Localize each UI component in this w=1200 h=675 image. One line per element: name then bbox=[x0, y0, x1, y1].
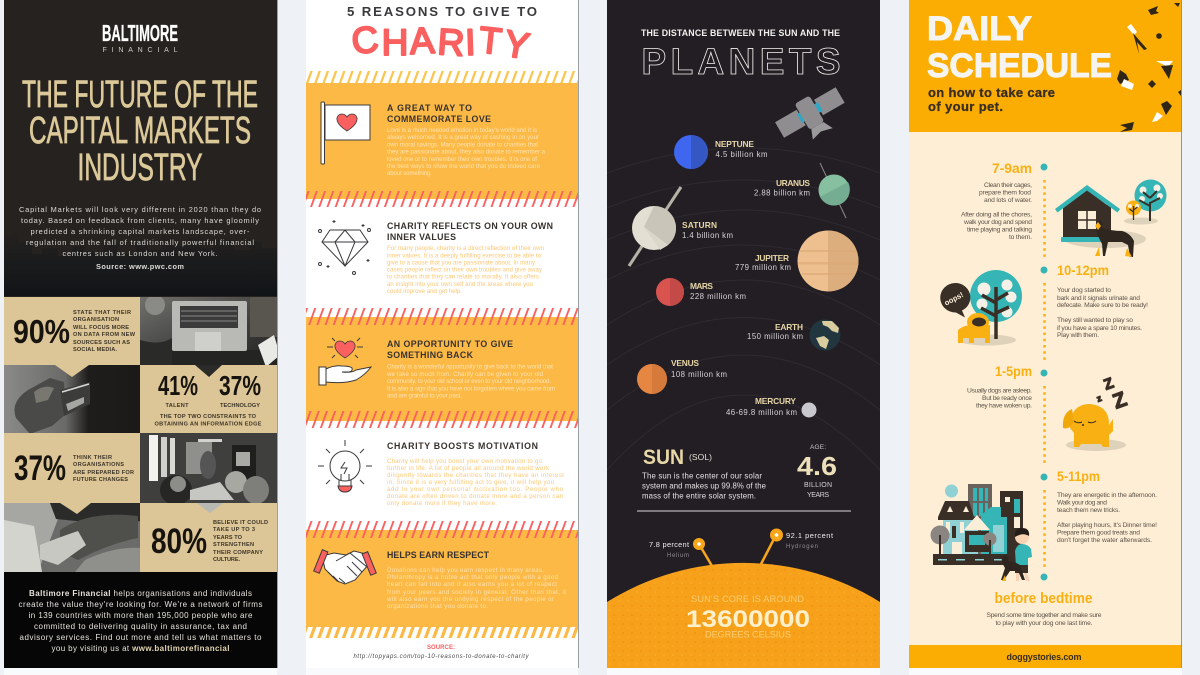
section 1 text: they are passionate about, they also donate to remember a bbox=[387, 148, 546, 156]
time: before bedtime: Spend some time together and make sure bbox=[986, 612, 1102, 619]
title: 5 REASONS TO GIVE TO bbox=[347, 4, 537, 19]
planet: Neptune bbox=[674, 135, 768, 169]
icon: light bulb bbox=[318, 440, 372, 492]
planet: Mars: MARS bbox=[690, 281, 713, 291]
callout: helium: 7.8 percent bbox=[649, 540, 689, 549]
footer: about Baltimore Financial bbox=[4, 572, 277, 668]
footer band: doggystories.com bbox=[1006, 652, 1082, 662]
time: 1-5pm: But be ready once bbox=[982, 395, 1032, 402]
section 3 text: we take so much from. Charity can be given to your old bbox=[386, 371, 543, 378]
panel: 5 Reasons to Give to Charity bbox=[306, 0, 579, 668]
section 5 text: Donations can help you earn respect in many areas. bbox=[387, 567, 544, 574]
illustration: sleeping dog: z bbox=[1095, 393, 1103, 404]
planet: Uranus: 2.88 billion km bbox=[754, 188, 810, 198]
stat: 37 percent prepared: FUTURE CHANGES bbox=[73, 477, 128, 483]
intro text: today. Based on feedback from clients, many have gloomily bbox=[21, 216, 259, 225]
time: before bedtime bbox=[986, 590, 1102, 627]
icon: hand holding heart bbox=[319, 338, 371, 385]
sun age: 4.6 bbox=[797, 451, 837, 481]
time: 5-11pm: They are energetic in the afternoon. bbox=[1057, 492, 1157, 499]
section 2 text: INNER VALUES bbox=[387, 232, 456, 242]
title: CHARITY bbox=[350, 18, 532, 67]
stat: 41 and 37 percent constraints: TECHNOLOGY bbox=[220, 403, 260, 409]
time: 5-11pm: 5-11pm bbox=[1057, 469, 1100, 484]
photo: restaurant table bbox=[140, 433, 277, 505]
time: 7-9am: to them. bbox=[1009, 234, 1032, 241]
intro text: centres such as London and New York. bbox=[62, 249, 218, 258]
section 5 text: will also earn you the undying respect of the people or bbox=[386, 596, 554, 603]
illustration: oops pug and tree bbox=[940, 270, 1022, 346]
illustration: sleeping dog: Z bbox=[1110, 388, 1130, 414]
time: 7-9am: prepare them food bbox=[979, 190, 1031, 196]
section 2 text: could improve and get help. bbox=[387, 288, 462, 295]
time: 1-5pm: they have woken up. bbox=[976, 402, 1032, 410]
section bands bbox=[306, 71, 578, 638]
time: 7-9am: Clean their cages, bbox=[984, 182, 1032, 189]
planet: Neptune: NEPTUNE bbox=[715, 139, 754, 149]
icon: satellite bbox=[772, 82, 853, 152]
intro text bbox=[19, 205, 261, 271]
stat: 80 percent culture: YEARS TO bbox=[213, 535, 243, 541]
planet: Uranus: URANUS bbox=[776, 178, 810, 188]
section 2 text: to charities that they can relate to morally. It also offers bbox=[387, 274, 539, 280]
title bbox=[22, 74, 258, 189]
stat: 80 percent culture: CULTURE. bbox=[213, 557, 240, 563]
title: SCHEDULE bbox=[927, 47, 1112, 85]
intro text: predicted a shrinking capital markets landscape, over- bbox=[30, 227, 250, 236]
divider bbox=[637, 510, 851, 512]
sun core temperature: 13600000 bbox=[686, 606, 810, 633]
source: http://topyaps.com/top-10-reasons-to-donate-to-charity bbox=[354, 654, 530, 660]
sun core temperature bbox=[686, 594, 810, 640]
stat: 90 percent: ORGANISATION bbox=[73, 317, 119, 323]
stat: 41 and 37 percent constraints: 37% bbox=[219, 370, 261, 401]
planet: Earth: EARTH bbox=[775, 322, 803, 332]
illustration: sleeping dog: Z bbox=[1102, 375, 1116, 394]
title: on how to take care bbox=[928, 85, 1055, 100]
decorative confetti icons bbox=[1117, 3, 1181, 132]
timeline bbox=[1040, 164, 1048, 580]
icon: handshake bbox=[314, 550, 376, 584]
logo: Baltimore Financial: BALTIMORE bbox=[102, 20, 178, 46]
time: 7-9am: After doing all the chores, bbox=[961, 212, 1032, 218]
time: before bedtime: to play with your dog one last time. bbox=[996, 620, 1093, 627]
section 3 text: Charity is a wonderful opportunity to give back to the world that bbox=[387, 364, 553, 370]
stat: 80 percent culture bbox=[151, 520, 268, 563]
planet: Saturn bbox=[629, 187, 733, 266]
stat: 37 percent prepared: ARE PREPARED FOR bbox=[73, 470, 134, 476]
callout: helium: Helium bbox=[667, 553, 689, 559]
time: 10-12pm: defecate. Make sure to be ready! bbox=[1057, 302, 1148, 309]
stat: 80 percent culture: TAKE UP TO 3 bbox=[213, 527, 255, 533]
footer: about Baltimore Financial: committed to delivering quality in assurance, tax and bbox=[34, 622, 247, 631]
stat: 41 and 37 percent constraints: THE TOP TWO CONSTRAINTS TO bbox=[160, 414, 257, 420]
stat: 80 percent culture: THEIR COMPANY bbox=[213, 550, 263, 556]
section 4 text: add to your own personal motivation too. People who bbox=[387, 486, 564, 493]
section 1 text: A GREAT WAY TO bbox=[387, 103, 472, 113]
section 1 text: Love is a much needed emotion in today's world and it is bbox=[387, 127, 537, 134]
illustration: dog house and trees bbox=[1055, 180, 1166, 257]
section 4 text: diligently towards the charities that they have an interest bbox=[387, 472, 564, 479]
section 1 text: always welcomed. It is a great way of cashing in on your bbox=[387, 134, 539, 141]
footer: about Baltimore Financial: you by visiting us at www.baltimorefinancial bbox=[52, 644, 230, 653]
section 1 text: COMMEMORATE LOVE bbox=[387, 114, 491, 124]
notch arrows bbox=[195, 365, 223, 513]
footer: about Baltimore Financial: in 139 countries with more than 195,000 people who are bbox=[28, 611, 253, 620]
stat: 90 percent: 90% bbox=[13, 313, 70, 350]
stat: 37 percent prepared: ORGANISATIONS bbox=[73, 462, 124, 468]
section 5 text: from your peers and society in general. Other than that, it bbox=[387, 589, 566, 596]
title: DAILY bbox=[927, 10, 1032, 48]
time: 5-11pm: Prepare them good treats and bbox=[1057, 530, 1140, 536]
title: CAPITAL MARKETS bbox=[29, 110, 251, 152]
section 1 text: the best ways to show the world that you do indeed care bbox=[387, 163, 541, 170]
photo: laptop on desk bbox=[140, 295, 280, 368]
planet: Neptune: 4.5 billion km bbox=[716, 150, 768, 159]
footer: about Baltimore Financial: advisory services. Find out more and tell us what matters to bbox=[20, 633, 262, 642]
stat: 41 and 37 percent constraints bbox=[154, 370, 262, 428]
icon: diamond bbox=[318, 220, 370, 274]
title: INDUSTRY bbox=[78, 147, 202, 189]
callout: helium bbox=[649, 538, 712, 566]
stat: 90 percent: ON DATA FROM NEW bbox=[73, 332, 136, 338]
callout: hydrogen: 92.1 percent bbox=[786, 531, 833, 540]
stat: 80 percent culture: BELIEVE IT COULD bbox=[213, 520, 268, 526]
photo: hand holding phone bbox=[4, 365, 140, 434]
section 3 text: community, to your old school or even to your old neighborhood. bbox=[387, 378, 551, 385]
sun description: The sun is the center of our solar bbox=[642, 472, 762, 480]
planet: Jupiter bbox=[735, 230, 858, 292]
icon: flag with heart bbox=[321, 102, 370, 164]
planet: Mars bbox=[656, 278, 746, 306]
title: THE FUTURE OF THE bbox=[22, 74, 258, 116]
section 4 text: Charity will help you boost your own motivation to go bbox=[387, 458, 543, 465]
section 3 text bbox=[386, 339, 555, 400]
section 5 text: organizations that you donate to. bbox=[387, 603, 488, 610]
section 2 text: inner values. It is a deeply fulfilling exercise to be able to bbox=[387, 252, 542, 260]
section 1 text: loved one or to remember their own troubles. It is one of bbox=[387, 156, 537, 163]
time: 7-9am: 7-9am bbox=[992, 161, 1032, 176]
intro text: Capital Markets will look very different in 2020 than they do bbox=[19, 205, 261, 214]
section 5 text: heart can fall into and it also earns you a lot of respect bbox=[387, 581, 557, 588]
planet: Mercury bbox=[726, 396, 816, 418]
planet: Jupiter: 779 million km bbox=[735, 263, 791, 272]
stat: 90 percent bbox=[13, 310, 136, 353]
stat grid tan blocks bbox=[4, 297, 277, 572]
footer band bbox=[909, 645, 1181, 668]
source: SOURCE: bbox=[427, 645, 455, 651]
stat: 90 percent: SOCIAL MEDIA. bbox=[73, 347, 117, 353]
section 4 text: only donate more if they have more. bbox=[387, 500, 497, 507]
title: THE DISTANCE BETWEEN THE SUN AND THE bbox=[641, 28, 840, 38]
sun disc bbox=[607, 563, 880, 668]
section 5 text bbox=[386, 550, 566, 610]
section 4 text: CHARITY BOOSTS MOTIVATION bbox=[387, 441, 538, 451]
section 4 text: donate are often driven to donate more and a person can bbox=[387, 493, 563, 500]
planet: Earth bbox=[747, 320, 840, 350]
intro text: Source: www.pwc.com bbox=[96, 262, 184, 271]
sun age: BILLION bbox=[804, 482, 832, 489]
footer: about Baltimore Financial: create the value they're looking for. We're a network of firms bbox=[18, 600, 262, 609]
stat: 37 percent prepared: 37% bbox=[14, 449, 66, 488]
title: PLANETS bbox=[642, 41, 840, 82]
time: 7-9am: and lots of water. bbox=[984, 197, 1032, 204]
planet: Jupiter: JUPITER bbox=[755, 253, 789, 263]
sun description: SUN bbox=[643, 446, 684, 469]
stat: 37 percent prepared bbox=[14, 449, 134, 488]
section 3 text: and are grateful to your past. bbox=[387, 392, 462, 400]
panel: Daily Schedule bbox=[909, 0, 1182, 668]
section 3 text: SOMETHING BACK bbox=[387, 350, 474, 360]
planet: Venus: VENUS bbox=[671, 358, 699, 368]
panel: Baltimore Financial capital markets bbox=[4, 0, 280, 668]
time: 5-11pm: teach them new tricks. bbox=[1057, 507, 1120, 514]
title: of your pet. bbox=[928, 99, 1003, 114]
planet: Venus: 108 million km bbox=[671, 370, 727, 379]
section 2 text: cases people reflect on their own troubles and give away bbox=[387, 266, 543, 274]
section 5 text: HELPS EARN RESPECT bbox=[387, 550, 490, 560]
bottom page strips bbox=[4, 668, 1182, 675]
time: before bedtime: before bedtime bbox=[994, 590, 1092, 607]
planet: Mercury: MERCURY bbox=[755, 396, 796, 406]
time: 1-5pm bbox=[967, 364, 1032, 410]
stat: 37 percent prepared: THINK THEIR bbox=[73, 455, 112, 461]
time: 5-11pm: After playing hours, It's Dinner time! bbox=[1057, 522, 1157, 529]
section 1 text: about something. bbox=[387, 170, 432, 177]
section 3 text: AN OPPORTUNITY TO GIVE bbox=[387, 339, 513, 349]
section 2 text: CHARITY REFLECTS ON YOUR OWN bbox=[387, 221, 553, 231]
sun core temperature: DEGREES CELSIUS bbox=[705, 630, 791, 640]
section 5 text: Philanthropy is a noble act that only people with a good bbox=[387, 574, 558, 581]
planet: Saturn: 1.4 billion km bbox=[682, 231, 733, 240]
logo: Baltimore Financial: FINANCIAL bbox=[102, 47, 178, 54]
section 2 text: an insight into your own self and the areas where you bbox=[387, 281, 533, 288]
illustration: city, boy and dog bbox=[930, 484, 1032, 581]
intro text: regulation and the fall of traditionally powerful financial bbox=[26, 238, 254, 247]
stat: 80 percent culture: 80% bbox=[151, 522, 207, 561]
section 4 text: further in life. A lot of people all around the world work bbox=[387, 465, 550, 472]
stat: 90 percent: SOURCES SUCH AS bbox=[73, 340, 130, 346]
section 3 text: It is also a sign that you have not forgotten where you came from bbox=[387, 386, 555, 392]
stat: 90 percent: STATE THAT THEIR bbox=[73, 310, 131, 316]
time: 1-5pm: 1-5pm bbox=[995, 364, 1032, 379]
panel: Distance between the Sun and the Planets bbox=[607, 0, 880, 668]
time: 5-11pm bbox=[1057, 469, 1157, 544]
header band bbox=[909, 0, 1181, 132]
time: 10-12pm bbox=[1057, 263, 1148, 339]
title bbox=[927, 10, 1112, 114]
section 1 text: own moral savings. Many people donate to charities that bbox=[387, 142, 538, 148]
section 2 text: give to a cause that you are passionate about. In many bbox=[387, 260, 536, 266]
time: 10-12pm: 10-12pm bbox=[1057, 263, 1109, 278]
callout: hydrogen bbox=[760, 528, 833, 566]
stat: 90 percent: WILL FOCUS MORE bbox=[73, 325, 129, 331]
illustration: oops pug and tree: oops! bbox=[943, 290, 965, 308]
sun description: system and makes up 99.8% of the bbox=[642, 482, 766, 490]
callout: hydrogen: Hydrogen bbox=[786, 544, 818, 550]
time: 5-11pm: don't forget the water afterwards. bbox=[1057, 537, 1152, 544]
sun age: YEARS bbox=[807, 492, 829, 499]
orbits bbox=[607, 148, 880, 470]
city skyline backdrop bbox=[4, 232, 277, 296]
logo: Baltimore Financial bbox=[102, 20, 178, 54]
stat: 41 and 37 percent constraints: TALENT bbox=[166, 403, 189, 409]
time: 10-12pm: Your dog started to bbox=[1057, 287, 1111, 294]
source bbox=[354, 645, 530, 660]
photo: person in plaid using phone bbox=[4, 503, 140, 572]
stat: 41 and 37 percent constraints: OBTAINING AN INFORMATION EDGE bbox=[154, 422, 262, 428]
section 2 text: For many people, charity is a direct reflection of their own bbox=[387, 245, 544, 252]
sun age: AGE: bbox=[810, 444, 826, 451]
section 4 text: in. Since it is a very fulfilling act to give, it will help you bbox=[387, 479, 554, 486]
time: 7-9am: time playing and talking bbox=[967, 226, 1032, 234]
sun core temperature: SUN'S CORE IS AROUND bbox=[691, 594, 804, 604]
footer: about Baltimore Financial: Baltimore Financial helps organisations and individuals bbox=[29, 589, 252, 598]
section 1 text bbox=[387, 103, 546, 177]
planet: Saturn: SATURN bbox=[682, 220, 717, 230]
planet: Venus bbox=[637, 358, 727, 394]
sun description: mass of the entire solar system. bbox=[642, 492, 756, 500]
section 4 text bbox=[387, 441, 564, 507]
sun description bbox=[642, 446, 766, 500]
stat: 41 and 37 percent constraints: 41% bbox=[158, 370, 198, 401]
time: 10-12pm: if you have a spare 10 minutes. bbox=[1057, 325, 1142, 332]
time: 10-12pm: Play with them. bbox=[1057, 332, 1099, 339]
sun age bbox=[797, 444, 837, 499]
stat: 80 percent culture: STRENGTHEN bbox=[213, 542, 254, 548]
planet: Uranus bbox=[754, 163, 850, 218]
planet: Mercury: 46-69.8 million km bbox=[726, 408, 797, 417]
time: 10-12pm: bark and it signals urinate and bbox=[1057, 295, 1140, 302]
sun description: (SOL) bbox=[689, 452, 712, 462]
illustration: sleeping dog bbox=[1063, 375, 1130, 451]
time: 7-9am bbox=[961, 161, 1032, 241]
time: 5-11pm: Walk your dog and bbox=[1057, 500, 1107, 506]
section 2 text bbox=[387, 221, 553, 295]
planet: Earth: 150 million km bbox=[747, 332, 803, 341]
planet: Mars: 228 million km bbox=[690, 292, 746, 301]
time: 10-12pm: They still wanted to play so bbox=[1057, 317, 1133, 324]
time: 7-9am: walk your dog and spend bbox=[963, 219, 1032, 226]
time: 1-5pm: Usually dogs are asleep. bbox=[967, 388, 1032, 394]
